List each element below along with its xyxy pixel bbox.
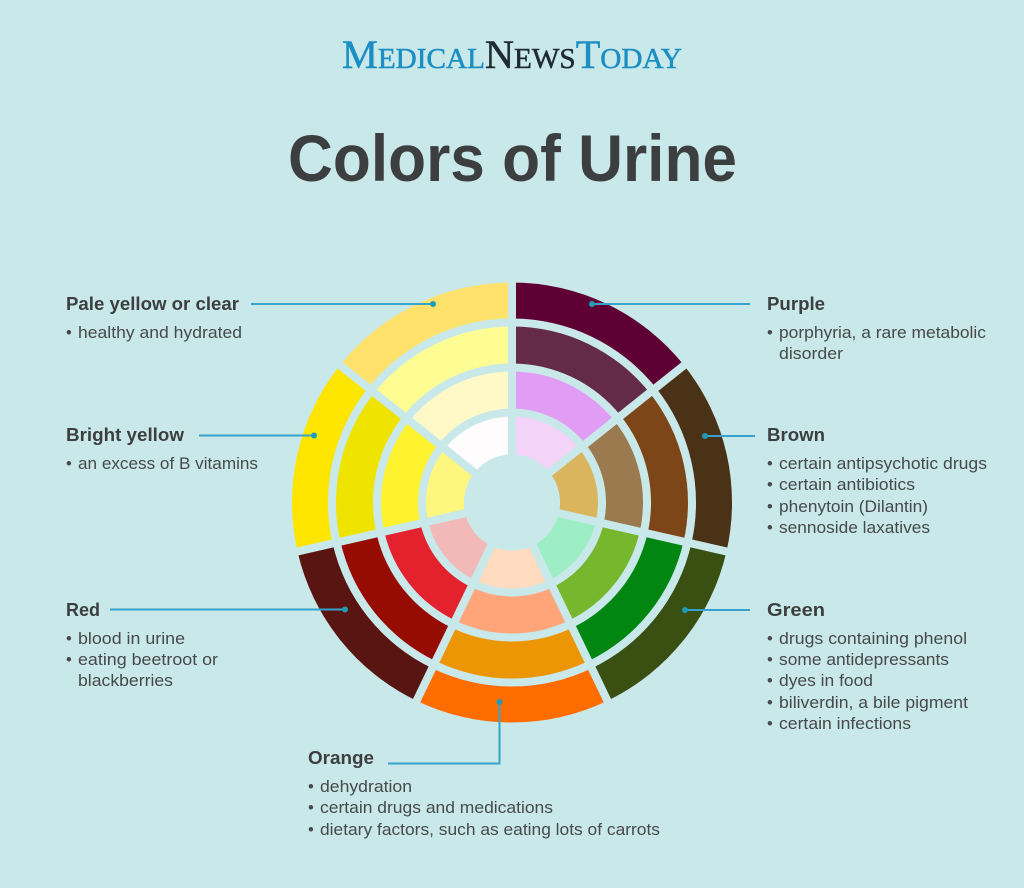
callout: pale yellow or clear: healthy and hydrated xyxy=(78,324,242,342)
callout: green: • xyxy=(767,651,773,669)
callout: green: • xyxy=(767,715,773,733)
callout: green xyxy=(682,600,968,733)
callout: orange: Orange xyxy=(308,748,374,768)
segment: orange xyxy=(370,529,607,775)
segment: red xyxy=(262,455,499,701)
callout: pale yellow or clear xyxy=(66,294,436,342)
callout: bright yellow: an excess of B vitamins xyxy=(78,455,258,473)
callout: orange: • xyxy=(308,799,314,817)
callout: red: • xyxy=(66,630,72,648)
callout: brown: • xyxy=(767,476,773,494)
callout: brown: Brown xyxy=(767,425,825,445)
callout: green: certain infections xyxy=(779,715,911,733)
callout: red: eating beetroot or xyxy=(78,651,219,669)
callout: purple: • xyxy=(767,324,773,342)
callout: green: • xyxy=(767,672,773,690)
callout: brown: • xyxy=(767,498,773,516)
callout: brown: sennoside laxatives xyxy=(779,519,930,537)
callout: bright yellow: Bright yellow xyxy=(66,425,185,445)
logo: Medical News Today: MEDICALNEWSTODAY xyxy=(342,32,682,77)
callout: green: • xyxy=(767,630,773,648)
segment: brown xyxy=(535,365,791,618)
callout: bright yellow xyxy=(66,425,317,473)
callout: green: drugs containing phenol xyxy=(779,630,967,648)
callout: brown: • xyxy=(767,519,773,537)
callout: pale yellow or clear: • xyxy=(66,324,72,342)
callout: green: biliverdin, a bile pigment xyxy=(779,694,968,712)
segment: purple xyxy=(512,282,684,473)
callout: red: blackberries xyxy=(78,672,173,690)
callout: red: blood in urine xyxy=(78,630,185,648)
color wheel xyxy=(259,231,791,775)
callout: brown: • xyxy=(767,455,773,473)
callout: red: • xyxy=(66,651,72,669)
callout: green: dyes in food xyxy=(779,672,873,690)
callout: bright yellow: • xyxy=(66,455,72,473)
callout: brown: phenytoin (Dilantin) xyxy=(779,498,928,516)
segment: green xyxy=(503,509,726,719)
callout: brown: certain antipsychotic drugs xyxy=(779,455,987,473)
callout: green: • xyxy=(767,694,773,712)
callout: brown: certain antibiotics xyxy=(779,476,915,494)
callout: green: some antidepressants xyxy=(779,651,949,669)
callout: red: Red xyxy=(66,600,100,620)
callout: orange: certain drugs and medications xyxy=(320,799,553,817)
callout: green: Green xyxy=(767,600,825,620)
callout: orange: dietary factors, such as eating lots of carrots xyxy=(320,821,660,839)
callout: brown xyxy=(702,425,987,537)
callout: purple: Purple xyxy=(767,294,825,314)
callout: purple: disorder xyxy=(779,345,844,363)
callout: orange: dehydration xyxy=(320,778,412,796)
callout: purple: porphyria, a rare metabolic xyxy=(779,324,986,342)
callout: pale yellow or clear: Pale yellow or clear xyxy=(66,294,239,314)
callout: orange xyxy=(308,699,660,839)
callout: red xyxy=(66,600,348,690)
segment: bright yellow xyxy=(259,341,483,551)
callout: orange: • xyxy=(308,778,314,796)
callout: purple xyxy=(589,294,986,363)
callout: orange: • xyxy=(308,821,314,839)
title: Colors of Urine xyxy=(288,121,737,195)
segment: pale yellow xyxy=(340,231,596,484)
